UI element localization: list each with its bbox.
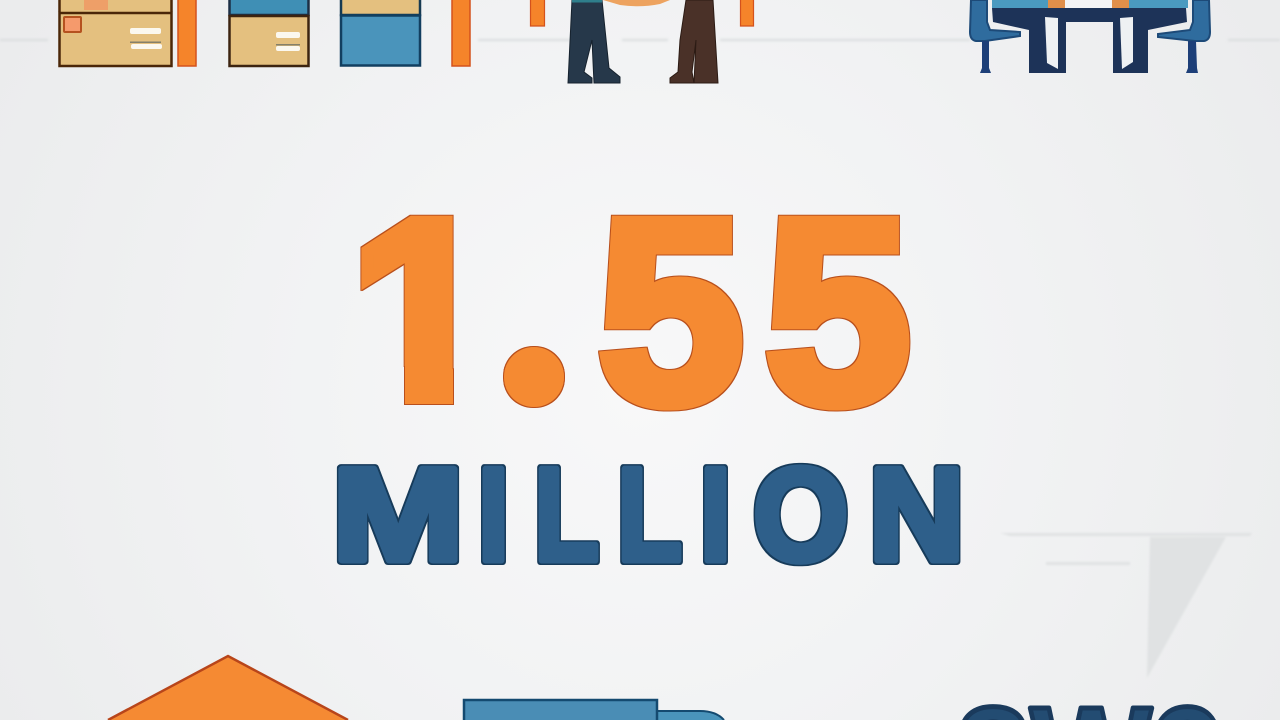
sign post left — [530, 0, 544, 26]
unit label: I — [700, 441, 731, 588]
big number — [360, 214, 910, 412]
big number: 5 — [765, 165, 911, 458]
seated figures — [992, 8, 1187, 73]
unit label: L — [534, 441, 599, 588]
chair left — [970, 0, 1020, 41]
big number: . — [476, 23, 593, 492]
icon: orange post 1 — [178, 0, 196, 66]
unit label: O — [753, 441, 848, 588]
icon: meeting table — [970, 0, 1210, 73]
table centre — [1065, 0, 1112, 8]
shirt right — [1120, 17, 1133, 69]
icon: parcels right — [341, 0, 420, 66]
big number: 5 — [598, 165, 744, 458]
person left shirt — [572, 0, 602, 2]
icon: parcels middle — [230, 0, 308, 66]
icon: truck — [464, 700, 724, 720]
unit label: L — [617, 441, 682, 588]
clasped hands — [603, 0, 670, 6]
chair right leg — [1186, 41, 1198, 73]
floor line — [0, 39, 1280, 41]
sign post right — [740, 0, 754, 26]
icon: handshake figures — [530, 0, 754, 83]
person left trousers — [568, 0, 620, 83]
chair left leg — [980, 41, 991, 73]
hands — [1048, 0, 1065, 8]
person right trousers — [670, 0, 718, 83]
icon: stacked parcels left — [60, 0, 172, 66]
big number: 1 — [350, 165, 495, 458]
faint plane watermark — [1000, 533, 1252, 678]
shirt left — [1045, 17, 1058, 69]
icon: orange post 2 — [452, 0, 470, 66]
chair right — [1158, 0, 1210, 41]
unit label: M — [332, 441, 464, 588]
table top — [992, 0, 1188, 8]
unit label: N — [869, 441, 964, 588]
unit label: I — [478, 441, 509, 588]
icon: house roof — [108, 656, 348, 720]
